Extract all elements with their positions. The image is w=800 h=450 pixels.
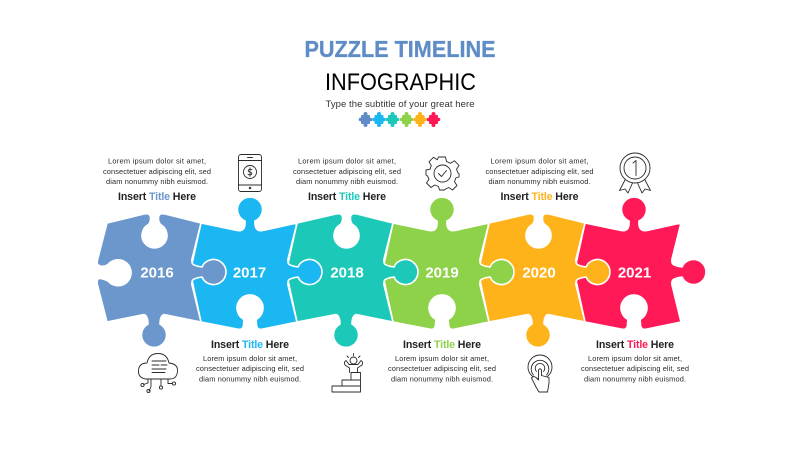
- icon: person on stairs: [332, 354, 363, 392]
- piece 2021: [576, 197, 706, 329]
- text block 2019: consectetuer adipiscing elit, sed: [388, 364, 496, 373]
- mini puzzle row: [359, 112, 440, 127]
- text block 2020: consectetuer adipiscing elit, sed: [486, 167, 594, 176]
- text block 2017: Lorem ipsum dolor sit amet,: [203, 354, 297, 363]
- text block 2017: [196, 339, 304, 384]
- puzzle timeline: [97, 197, 706, 347]
- text block 2020: Lorem ipsum dolor sit amet,: [490, 156, 588, 166]
- piece 2020: 2020: [522, 264, 556, 282]
- text block 2017: Insert Title Here: [211, 339, 289, 351]
- text block 2016: [103, 156, 211, 203]
- text block 2021: Lorem ipsum dolor sit amet,: [588, 354, 682, 363]
- subtitle: Type the subtitle of your great here: [326, 99, 474, 110]
- piece 2016: [97, 214, 226, 347]
- text block 2020: [486, 156, 594, 203]
- text block 2019: Insert Title Here: [403, 339, 481, 351]
- title: PUZZLE TIMELINE: [304, 36, 496, 62]
- text block 2021: [581, 339, 689, 384]
- text block 2019: diam nonummy nibh euismod.: [391, 374, 493, 384]
- title: [304, 36, 496, 96]
- text block 2018: diam nonummy nibh euismod.: [296, 177, 398, 186]
- text block 2020: diam nonummy nibh euismod.: [488, 177, 590, 186]
- text block 2021: Insert Title Here: [596, 339, 674, 351]
- text block 2021: diam nonummy nibh euismod.: [584, 374, 686, 384]
- text block 2016: Lorem ipsum dolor sit amet,: [108, 156, 206, 166]
- icon: medal: [620, 153, 650, 193]
- piece 2018: 2018: [330, 264, 364, 282]
- text block 2021: consectetuer adipiscing elit, sed: [581, 364, 689, 373]
- text block 2018: consectetuer adipiscing elit, sed: [293, 167, 401, 176]
- icon: touch hand: [528, 355, 552, 392]
- text block 2016: consectetuer adipiscing elit, sed: [103, 167, 211, 176]
- text block 2018: Lorem ipsum dolor sit amet,: [298, 156, 396, 166]
- text block 2017: diam nonummy nibh euismod.: [199, 374, 301, 384]
- piece 2019: 2019: [425, 264, 459, 282]
- text block 2016: diam nonummy nibh euismod.: [106, 177, 208, 186]
- icon: phone with dollar: [238, 154, 262, 192]
- piece 2021: 2021: [618, 264, 651, 282]
- text block 2019: Lorem ipsum dolor sit amet,: [395, 354, 489, 363]
- text block 2018: Insert Title Here: [308, 191, 386, 203]
- text block 2020: Insert Title Here: [500, 191, 579, 203]
- piece 2019: [384, 197, 514, 329]
- piece 2017: 2017: [233, 264, 266, 282]
- piece 2020: [480, 214, 610, 347]
- text block 2016: Insert Title Here: [118, 191, 196, 203]
- text block 2019: [388, 339, 496, 384]
- text block 2018: [293, 156, 401, 203]
- piece 2018: [288, 214, 418, 347]
- icon: gear with check: [426, 157, 459, 190]
- icon: cloud circuit: [138, 354, 178, 393]
- title: INFOGRAPHIC: [325, 69, 476, 96]
- piece 2016: 2016: [140, 264, 174, 282]
- text block 2017: consectetuer adipiscing elit, sed: [196, 364, 304, 373]
- piece 2017: [192, 197, 322, 329]
